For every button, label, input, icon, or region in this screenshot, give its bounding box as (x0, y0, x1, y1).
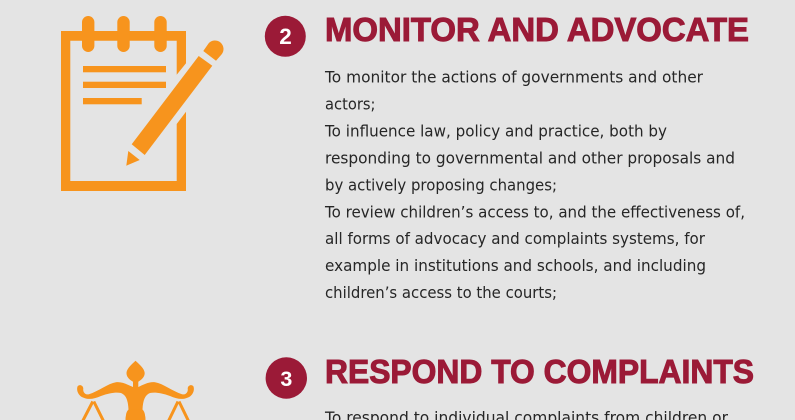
text block: monitor and advocate details: To monitor the actions of governments and other (324, 69, 704, 87)
text block: monitor and advocate details: actors; (325, 95, 376, 113)
badge: number 2: 2 (279, 24, 292, 49)
text block: monitor and advocate details: children’s access to the courts; (325, 284, 557, 302)
text block: monitor and advocate details: To influence law, policy and practice, both by (324, 122, 667, 140)
icon: balance scales (77, 361, 194, 420)
text block: monitor and advocate details (324, 69, 745, 302)
text block: monitor and advocate details: responding to governmental and other proposals and (325, 149, 735, 167)
text block: monitor and advocate details: by actively proposing changes; (325, 176, 557, 194)
heading: respond to complaints: RESPOND TO COMPLAINTS (325, 353, 754, 390)
text block: monitor and advocate details: To review children’s access to, and the effectiveness of, (324, 203, 745, 221)
badge: number 3 (266, 357, 307, 399)
heading: monitor and advocate: MONITOR AND ADVOCATE (325, 11, 749, 48)
badge: number 3: 3 (280, 367, 292, 391)
badge: number 2 (265, 16, 306, 57)
text block: monitor and advocate details: all forms of advocacy and complaints systems, for (325, 230, 706, 248)
text block: monitor and advocate details: example in institutions and schools, and including (325, 257, 706, 275)
icon: notepad and pencil (61, 16, 224, 191)
